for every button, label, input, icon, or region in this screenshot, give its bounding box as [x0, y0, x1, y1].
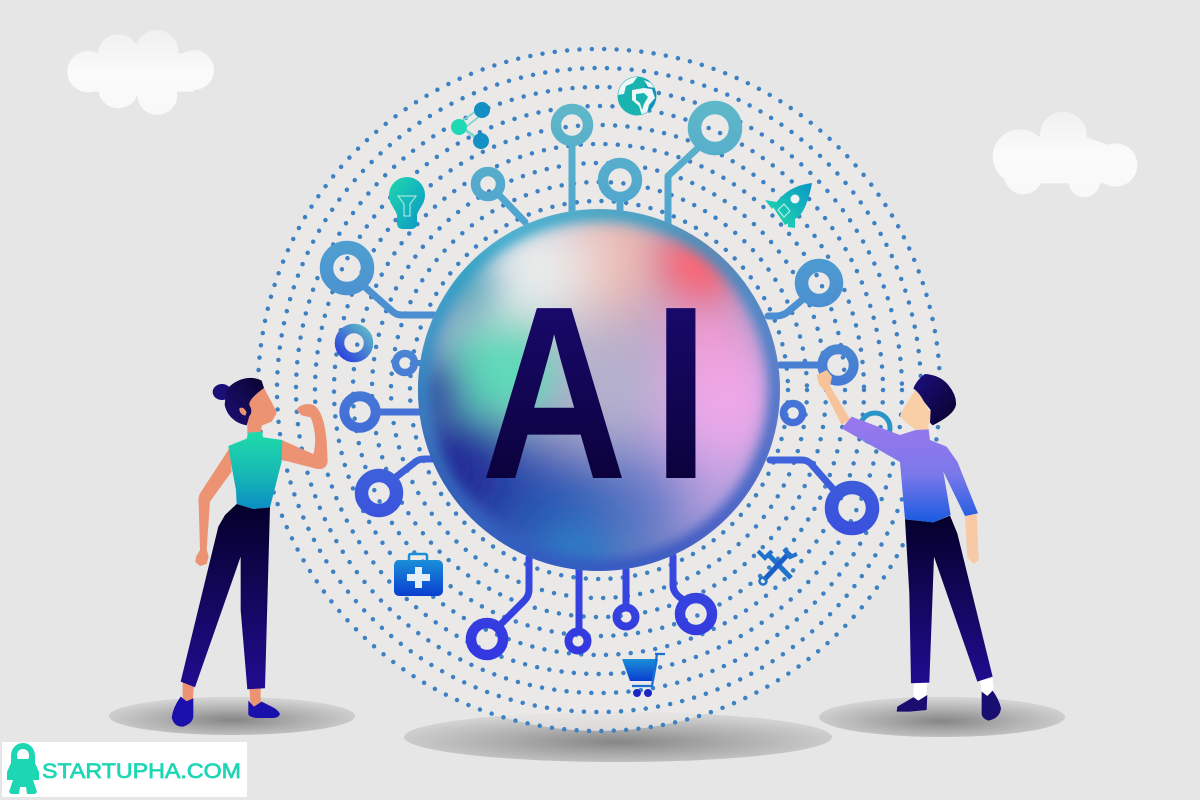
- node: bottom 4: [673, 556, 712, 630]
- node: right 5: [770, 460, 872, 528]
- icon: shopping cart: [622, 654, 665, 697]
- node: left 2 (ring): [340, 328, 368, 358]
- man: raised hand and forearm: [817, 370, 850, 425]
- man: shoes: [897, 691, 1001, 721]
- figure: man: [817, 370, 1001, 721]
- node: bottom 2: [568, 570, 588, 650]
- AI sphere: [418, 209, 780, 571]
- node: right 1: [768, 266, 836, 316]
- node: right 3: [784, 404, 802, 422]
- man: socks: [913, 678, 994, 701]
- woman: pants: [181, 504, 270, 689]
- node: top 1: [556, 109, 588, 212]
- logo: wordmark: STARTUPHA.COM: [42, 760, 241, 783]
- icon: rocket: [765, 183, 812, 228]
- icon: lightbulb: [389, 177, 425, 229]
- AI text: AI: [481, 255, 709, 530]
- node: right 2: [780, 349, 854, 381]
- icon: globe: [618, 76, 657, 116]
- woman: legs: [183, 682, 261, 707]
- woman: head: [239, 383, 277, 436]
- logo: robot rocket icon: [7, 743, 39, 794]
- icon: crossed tools: [758, 549, 797, 584]
- node: left 4: [344, 396, 420, 428]
- cloud: top left: [67, 30, 214, 115]
- woman: hair: [213, 378, 264, 425]
- ground shadow: left figure: [109, 697, 355, 735]
- woman: flexed arm: [280, 404, 328, 469]
- ground shadow: right figure: [819, 697, 1065, 737]
- node: left 1: [326, 248, 434, 315]
- dotted concentric rings: [258, 49, 940, 731]
- icon: share network: [451, 102, 490, 149]
- man: shirt: [842, 417, 978, 522]
- circuit nodes: [326, 108, 890, 655]
- node: left 3: [396, 354, 422, 372]
- logo: startupha.com: [2, 742, 247, 797]
- woman: shoes: [172, 697, 280, 727]
- man: pants: [905, 516, 993, 683]
- node: top left: [476, 172, 525, 222]
- node: bottom 3: [616, 570, 636, 626]
- man: far arm skin: [965, 514, 979, 564]
- ground shadow: sphere: [404, 712, 832, 762]
- woman: far arm: [195, 447, 232, 566]
- node: bottom 1: [471, 558, 529, 655]
- man: head: [900, 390, 939, 440]
- icon: medical kit: [394, 554, 443, 596]
- node: top 3: [668, 108, 736, 224]
- node: top 2: [603, 163, 637, 212]
- woman: ear: [239, 408, 247, 416]
- cloud: top right: [993, 112, 1137, 197]
- node: right 4 (ring behind arm): [860, 413, 890, 443]
- man: hair: [913, 374, 956, 425]
- node: left 5: [362, 459, 434, 510]
- figure: woman: [172, 378, 328, 727]
- woman: top: [228, 432, 282, 509]
